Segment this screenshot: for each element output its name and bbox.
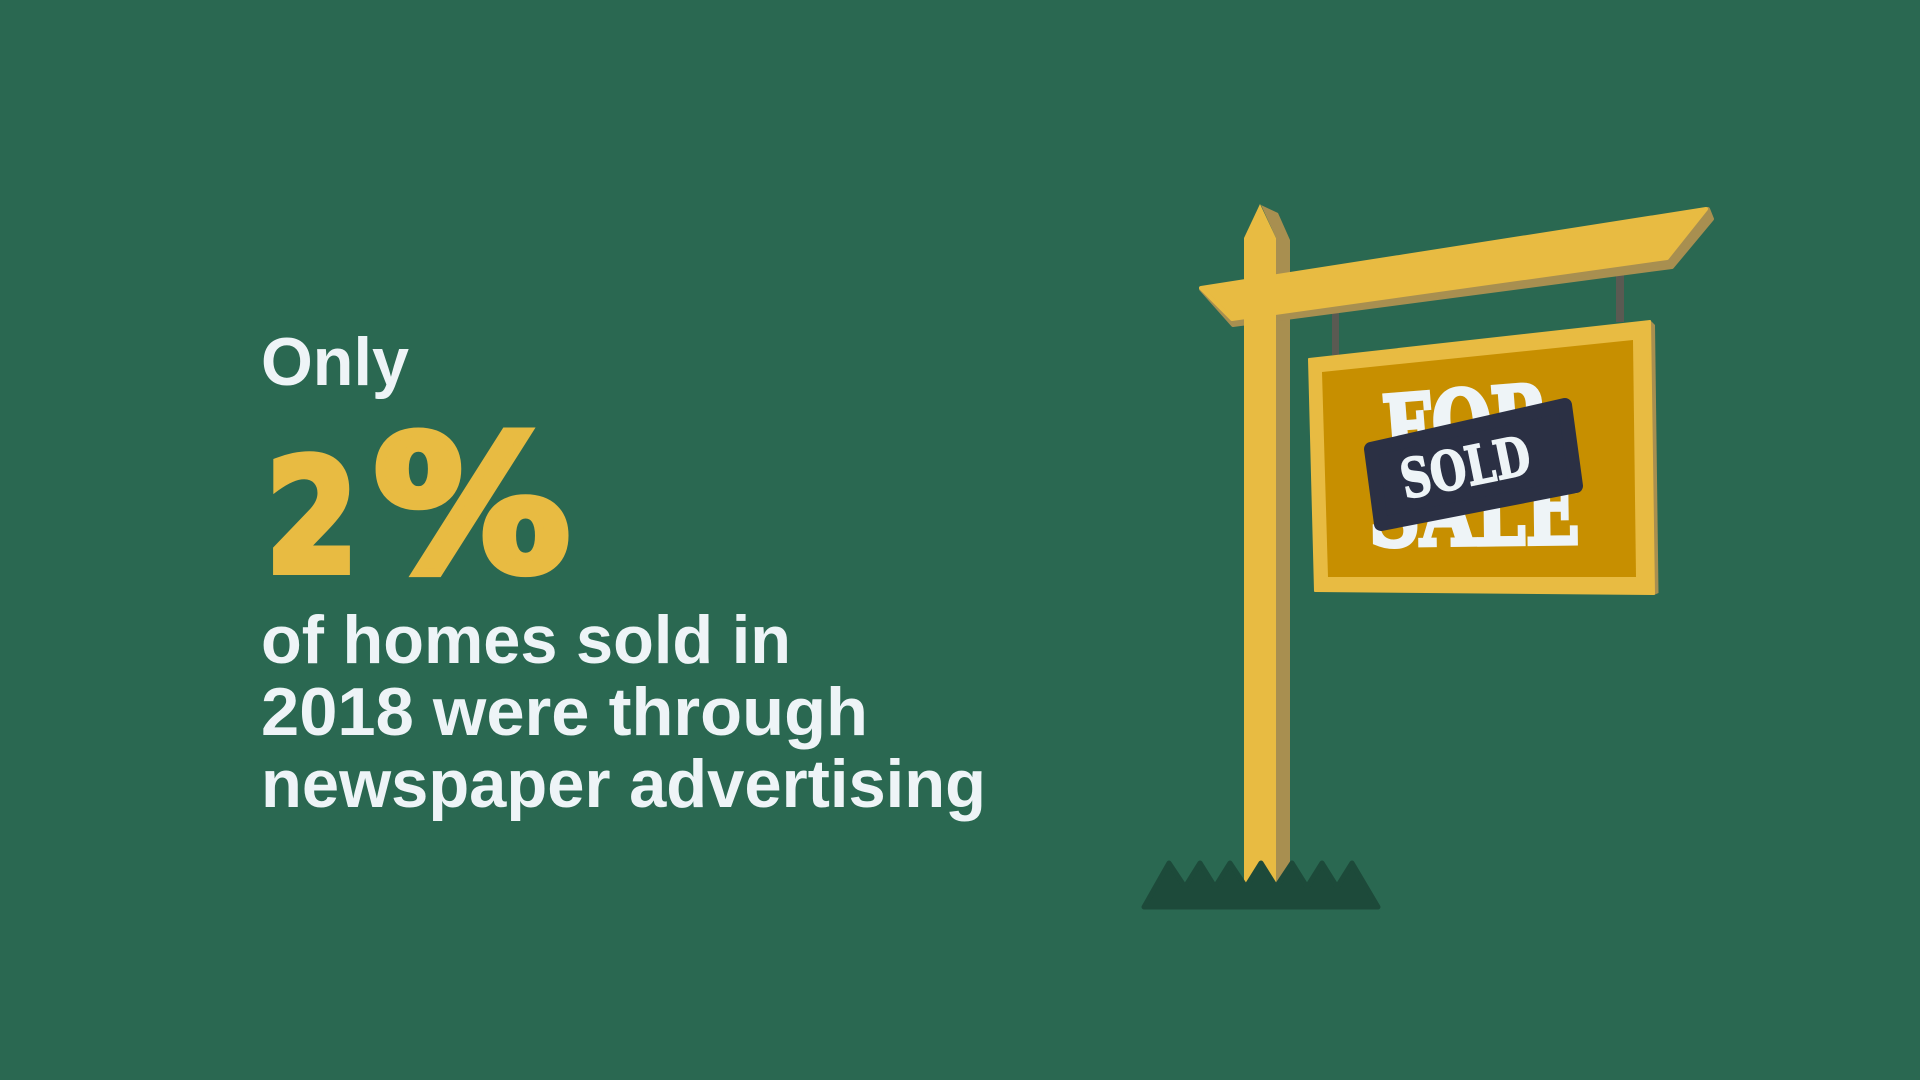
description: newspaper advertising	[261, 746, 986, 822]
description	[261, 602, 986, 822]
hanging chains	[1332, 272, 1624, 355]
sign board	[1309, 320, 1658, 595]
for sale lettering: FOR	[1379, 364, 1554, 487]
big number: 2%: 2	[266, 426, 358, 608]
sold tag: SOLD	[1395, 423, 1536, 512]
post side shade	[1261, 205, 1290, 885]
post front	[1244, 204, 1276, 885]
description: of homes sold in	[261, 602, 791, 678]
big number: 2%: %	[374, 397, 570, 614]
crossarm	[1201, 209, 1712, 325]
description: 2018 were through	[261, 674, 868, 750]
illustration: for sale sign post	[1144, 204, 1712, 907]
grass	[1144, 863, 1378, 907]
intro word: Only	[261, 324, 409, 400]
for sale lettering: SALE	[1368, 456, 1580, 569]
big number: 2%	[266, 397, 570, 614]
for sale lettering	[1368, 364, 1580, 569]
text block: statistic	[261, 324, 986, 822]
